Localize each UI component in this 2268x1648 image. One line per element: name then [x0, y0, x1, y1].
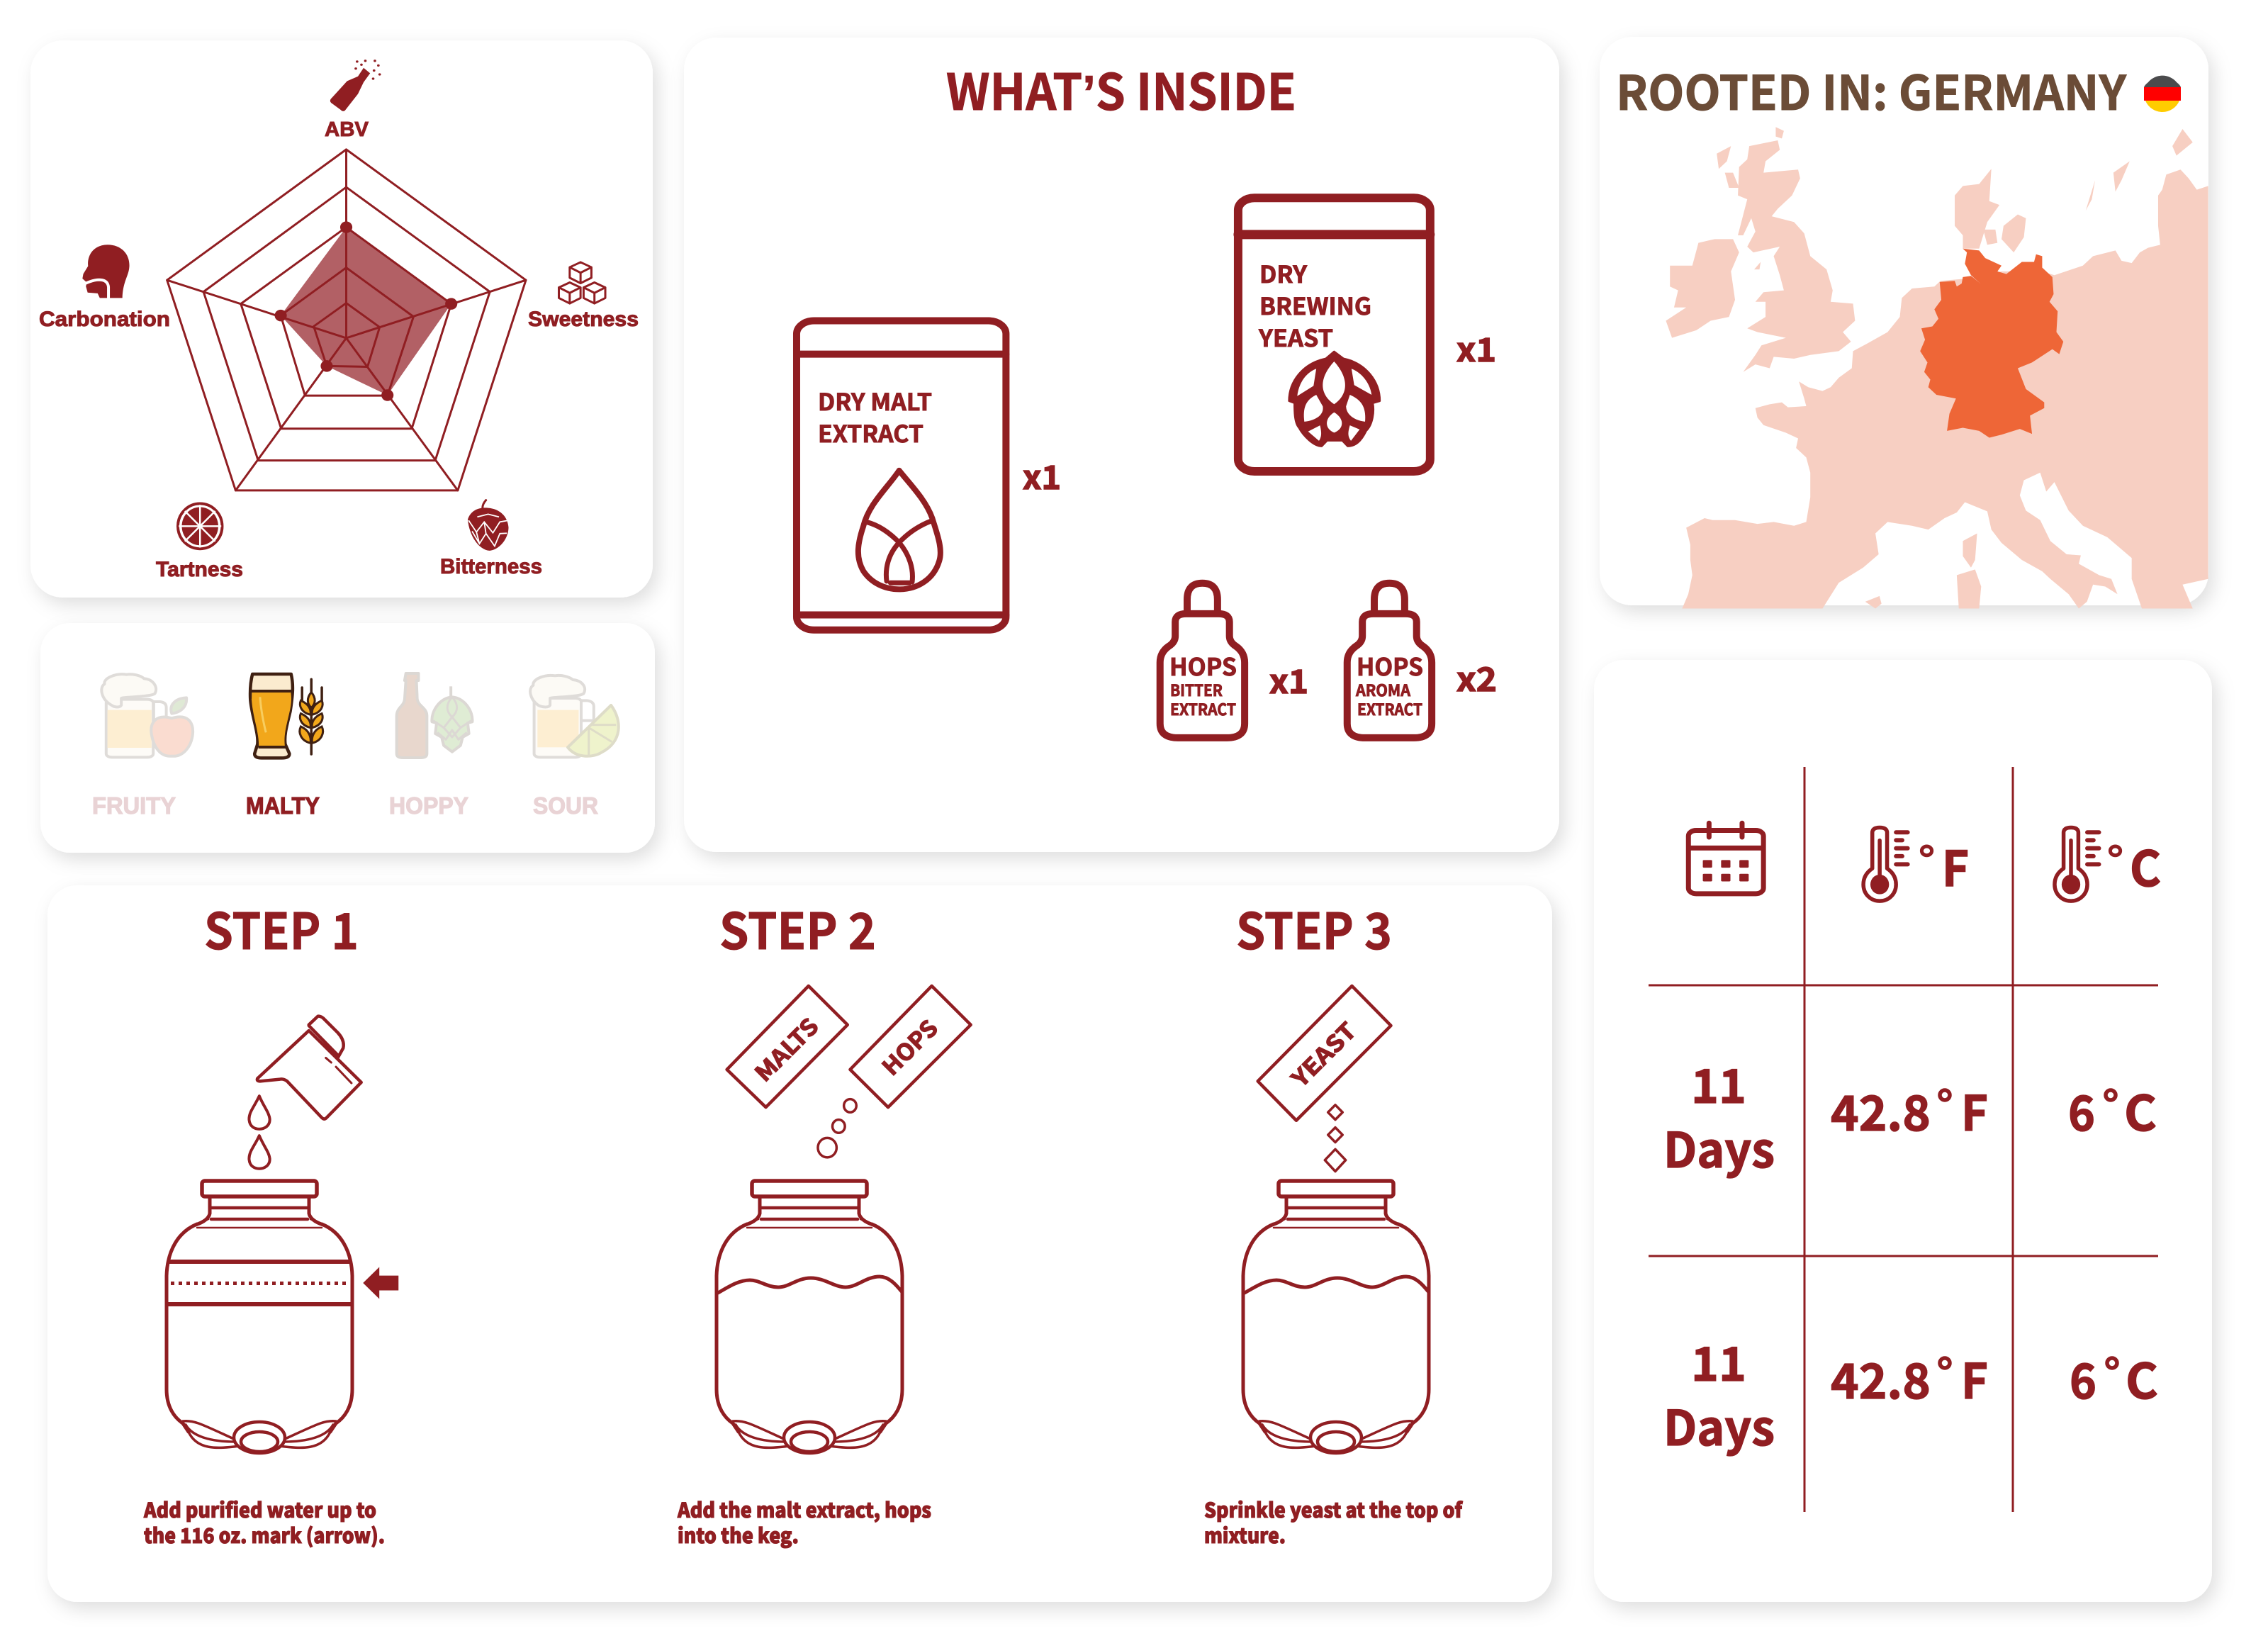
label: ABV: ABV [325, 118, 369, 141]
row 1: Celsius: 6 [2068, 1075, 2095, 1145]
icon: falling pellets [818, 1099, 856, 1157]
label: yeast: YEAST [1258, 320, 1333, 354]
text: step 1 instruction: the 116 oz. mark (arrow). [144, 1520, 385, 1549]
label: extract: EXTRACT [1170, 697, 1236, 720]
label: extract: EXTRACT [818, 415, 924, 449]
arrow: fill level [363, 1267, 398, 1299]
text: step 2 instruction: into the keg. [678, 1520, 799, 1549]
icon: keg with liquid [1243, 1181, 1429, 1453]
label: Bitterness: Bitterness [440, 555, 542, 578]
icon: hop cone [468, 500, 508, 551]
radar chart [167, 150, 526, 491]
quantity: malt x1: x1 [1023, 452, 1061, 499]
label: extract: EXTRACT [1357, 697, 1422, 720]
heading: step 1: STEP 1 [204, 892, 359, 964]
label: HOPPY: HOPPY [389, 792, 468, 819]
label: hops: HOPS [1169, 648, 1237, 683]
map of Europe [1666, 127, 2208, 609]
label: hops: HOPS [1357, 648, 1423, 683]
row 2: Fahrenheit: F [1961, 1342, 1988, 1413]
row 1: days: Days [1663, 1111, 1775, 1182]
label: FRUITY: FRUITY [92, 792, 176, 819]
icon: hops aroma extract bottle [1347, 583, 1432, 738]
text: step 3 instruction: mixture. [1204, 1520, 1286, 1549]
heading: what's inside: WHAT’S INSIDE [946, 53, 1296, 125]
label: brewing: BREWING [1259, 288, 1371, 322]
icon: hops packet: HOPS [874, 1011, 944, 1082]
row 2: Celsius: 6 [2070, 1342, 2096, 1413]
row 2: Fahrenheit: 42.8 [1831, 1342, 1931, 1413]
row 1: Fahrenheit [1831, 1075, 1988, 1145]
icon: hops packet [850, 986, 971, 1107]
quantity: bitter x1: x1 [1269, 656, 1308, 703]
row 2: Fahrenheit [1831, 1342, 1988, 1413]
text: step 3 instruction: Sprinkle yeast at the top of [1204, 1494, 1463, 1524]
panel: beer style selector [40, 623, 655, 853]
panel: what's inside [684, 38, 1559, 852]
icon: hops bitter extract bottle [1160, 583, 1245, 738]
label: dry malt extract: DRY MALT [818, 383, 932, 417]
label: dry: DRY [1259, 256, 1308, 290]
header: F: F [1942, 830, 1969, 900]
text: step 1 instruction: Add purified water up to [143, 1494, 376, 1524]
row 2: days: 11 [1691, 1327, 1746, 1395]
row 1: Fahrenheit: 42.8 [1831, 1075, 1931, 1145]
icon: yeast packet: YEAST [1283, 1014, 1363, 1094]
icon: citrus slice [178, 504, 222, 549]
panel: rooted in Germany [1600, 37, 2208, 609]
icon: malts packet: MALTS [747, 1010, 825, 1088]
row 1: days: 11 [1691, 1049, 1746, 1117]
icon: yeast bag [1238, 198, 1430, 471]
quantity: yeast x1: x1 [1456, 325, 1496, 371]
icon: beer bottle with hop [397, 673, 472, 758]
row 1: Fahrenheit: F [1961, 1075, 1988, 1145]
icon: keg with fill mark [167, 1181, 352, 1453]
text: step 2 instruction [677, 1494, 931, 1549]
quantity: aroma x2: x2 [1456, 654, 1497, 701]
heading: step 2: STEP 2 [719, 892, 876, 964]
label: Tartness: Tartness [156, 558, 243, 581]
icon: measuring jug pouring [249, 1016, 361, 1169]
panel: brewing steps [47, 885, 1552, 1602]
icon: malt extract bag [797, 321, 1006, 630]
row 1: Celsius: C [2124, 1075, 2157, 1145]
label: Carbonation: Carbonation [39, 308, 170, 331]
text: step 3 instruction [1204, 1494, 1463, 1549]
icon: German flag [2144, 76, 2181, 112]
label: aroma: AROMA [1355, 678, 1411, 701]
icon: malts packet [727, 986, 848, 1107]
row 1: days [1663, 1049, 1775, 1182]
label: SOUR: SOUR [533, 792, 598, 819]
panel: fermentation table [1594, 660, 2212, 1602]
icon: wheat beer glass with wheat [250, 674, 323, 758]
icon: beer mug with lime [530, 676, 619, 757]
map: Germany highlighted [1920, 249, 2063, 437]
label: MALTY: MALTY [246, 792, 320, 819]
icon: head carbonation [82, 245, 130, 299]
icon: sugar cubes [559, 262, 605, 303]
icon: beer mug with apple [101, 674, 193, 757]
row 2: days: Days [1663, 1389, 1775, 1459]
panel: flavour radar chart [30, 40, 653, 598]
icon: keg with liquid [717, 1181, 902, 1453]
icon: falling yeast granules [1325, 1105, 1346, 1172]
icon: calendar [1688, 823, 1763, 894]
heading: rooted in Germany: ROOTED IN: GERMANY [1616, 55, 2127, 124]
text: step 2 instruction: Add the malt extract, hops [677, 1494, 931, 1524]
row 2: days [1663, 1327, 1775, 1459]
row 2: Celsius: C [2126, 1342, 2158, 1413]
icon: thermometer Fahrenheit [1863, 828, 1932, 901]
icon: bottle ABV [330, 60, 381, 111]
label: bitter: BITTER [1170, 678, 1223, 701]
icon: thermometer Celsius [2055, 828, 2121, 901]
row 2: Celsius [2070, 1342, 2158, 1413]
header: C: C [2130, 830, 2161, 900]
heading: step 3: STEP 3 [1236, 892, 1392, 964]
text: step 1 instruction [143, 1494, 385, 1549]
row 1: Celsius [2068, 1075, 2157, 1145]
label: Sweetness: Sweetness [528, 308, 639, 331]
icon: yeast packet [1258, 986, 1391, 1121]
